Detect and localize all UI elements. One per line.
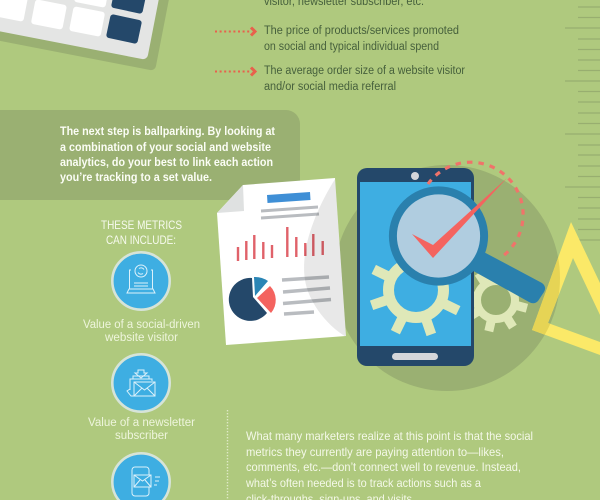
document with charts — [217, 176, 348, 345]
text: price of products: on social and typical individual spend — [264, 41, 439, 53]
icon: newsletter — [112, 354, 170, 412]
phone screen — [360, 182, 471, 346]
text: what many marketers realize: comments, etc.—don’t connect well to revenue. Instead, — [246, 460, 521, 474]
text: ballparking intro: you’re tracking to a set value. — [60, 170, 212, 184]
document fold — [217, 185, 244, 213]
dashed arc — [428, 162, 523, 256]
bar chart — [238, 227, 323, 261]
phone camera — [411, 172, 419, 180]
large gear — [370, 244, 462, 336]
text: average order size — [264, 65, 465, 93]
text: ballparking intro: a combination of your social and website — [60, 140, 271, 154]
text: average order size: and/or social media referral — [264, 81, 396, 93]
icon: laptop — [112, 252, 170, 310]
background circle — [334, 165, 560, 391]
icon: mobile message — [112, 453, 170, 500]
text: ballparking intro — [60, 124, 275, 184]
document text lines — [282, 277, 331, 314]
text: what many marketers realize: what’s often needed is to track actions such as a — [245, 476, 481, 490]
pie chart — [229, 277, 276, 321]
ruler ticks — [565, 7, 600, 240]
label: social-driven visitor: website visitor — [104, 332, 178, 344]
text: what many marketers realize: What many marketers realize at this point is that the social — [246, 429, 533, 443]
icon: check mark — [412, 178, 507, 258]
label: social-driven visitor: Value of a social-driven — [83, 319, 200, 331]
text: average order size: The average order size of a website visitor — [264, 65, 465, 77]
text: what many marketers realize — [245, 429, 533, 500]
text: price of products — [264, 25, 459, 53]
text: ballparking intro: analytics, do your best to link each action — [60, 155, 273, 169]
heading: these metrics: THESE METRICS — [101, 218, 182, 232]
arrow: price item — [215, 28, 255, 36]
heading: these metrics: CAN INCLUDE: — [106, 233, 176, 247]
small gear — [464, 268, 528, 332]
phone home button — [392, 353, 438, 360]
magnifying glass — [393, 190, 545, 303]
label: social-driven visitor — [83, 319, 200, 344]
heading: these metrics — [101, 218, 182, 247]
label: newsletter subscriber: Value of a newsletter — [88, 417, 195, 429]
text: ballparking intro: The next step is ballparking. By looking at — [60, 124, 275, 138]
keyboard illustration — [0, 0, 178, 71]
label: newsletter subscriber — [88, 417, 195, 442]
text: price of products: The price of products/services promoted — [264, 25, 459, 37]
icon: yellow set square — [532, 222, 600, 355]
dotted divider — [226, 410, 228, 500]
document header — [261, 192, 319, 218]
panel: ballparking band — [0, 110, 300, 200]
arrow: order size item — [215, 68, 255, 76]
label: newsletter subscriber: subscriber — [115, 430, 168, 442]
text: what many marketers realize: metrics they currently are paying attention to—likes, — [246, 445, 504, 459]
phone — [357, 168, 474, 366]
document shadow — [304, 176, 348, 338]
